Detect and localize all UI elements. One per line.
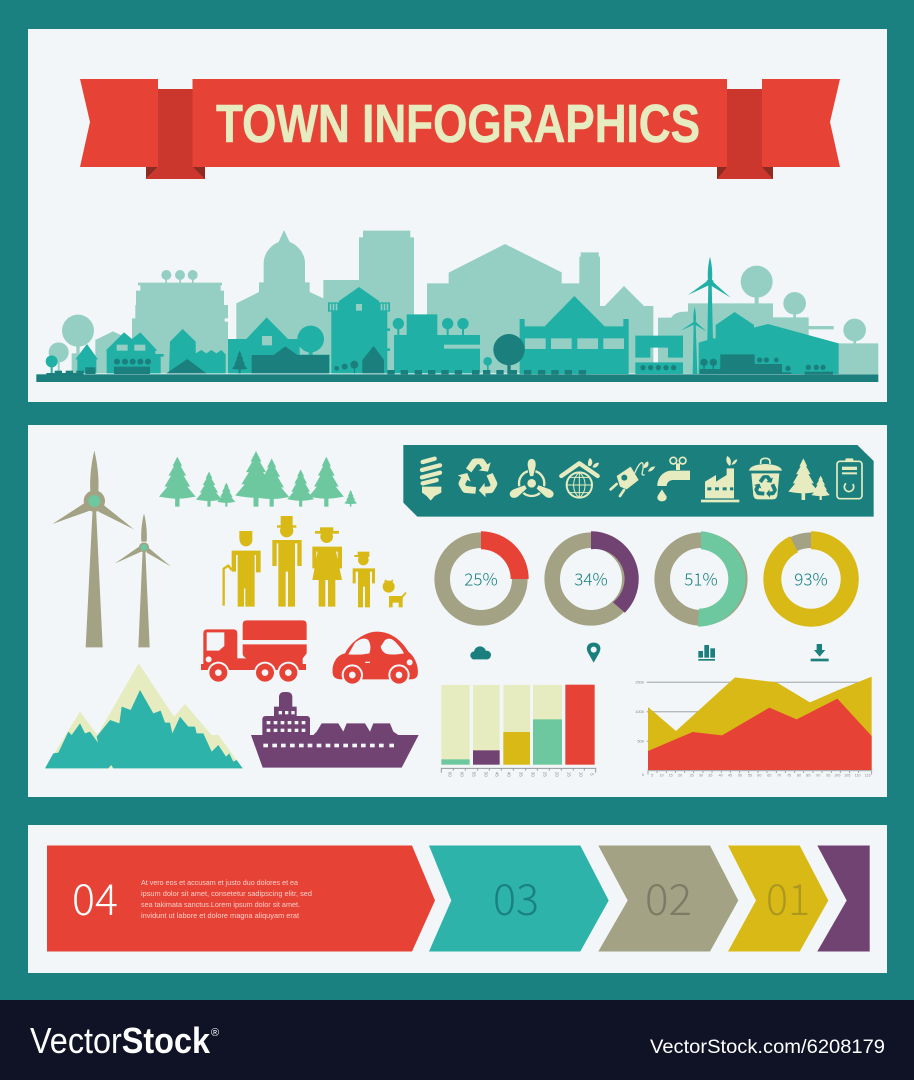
icon: pine trees <box>159 451 357 507</box>
icon: mountains <box>45 663 243 768</box>
area chart x labels: 95 <box>826 773 830 777</box>
icon: twin pines <box>788 458 830 500</box>
arrow: end block <box>817 846 870 952</box>
area chart x labels: 70 <box>777 773 781 777</box>
donut chart: 34% <box>552 531 639 618</box>
footer bar <box>0 1000 914 1080</box>
arrow 04 body text: ipsum dolor sit amet, consetetur sadipscing elitr, sed <box>141 889 312 898</box>
area chart x labels: 15 <box>669 773 673 777</box>
area chart y labels: 1500 <box>635 680 645 685</box>
panel: town elements <box>28 425 887 797</box>
arrow 04: 04 <box>72 866 118 928</box>
area chart x labels: 10 <box>660 773 664 777</box>
bar chart <box>441 685 596 777</box>
area chart x labels: 60 <box>757 773 761 777</box>
arrow 03: 03 <box>493 866 539 928</box>
bar chart axis labels: 25 <box>542 772 547 777</box>
panel: process arrows <box>28 825 887 973</box>
panel: town skyline <box>28 29 887 402</box>
arrow 04 body text <box>141 878 312 920</box>
area chart y labels <box>635 680 645 777</box>
icon: plug <box>611 461 655 496</box>
footer logo: VectorStock <box>30 1020 211 1061</box>
area chart y labels: 1000 <box>635 709 645 714</box>
area chart x labels: 35 <box>708 773 712 777</box>
bar chart axis labels: 60 <box>460 772 465 777</box>
icon: map pin <box>587 643 600 663</box>
area chart x labels: 115 <box>865 773 871 777</box>
icon: light bulb <box>422 459 441 501</box>
donut chart: 25%: 25% <box>464 566 498 590</box>
skyline: window cut-outs <box>117 304 624 351</box>
arrow 04 body text: invidunt ut labore et dolore magna aliquyam erat <box>141 911 300 920</box>
donut chart: 51%: 51% <box>684 566 718 590</box>
area chart x labels: 55 <box>748 773 752 777</box>
area chart x labels: 75 <box>787 773 791 777</box>
icon: water tap <box>657 457 690 501</box>
area chart x labels: 50 <box>738 773 742 777</box>
icon: wind turbines <box>52 451 171 647</box>
area chart x labels: 25 <box>690 773 694 777</box>
icon: family figures <box>224 516 407 607</box>
title text: TOWN INFOGRAPHICS <box>216 94 700 154</box>
icons and figures <box>45 451 419 768</box>
area chart x labels: 85 <box>806 773 810 777</box>
donut chart: 93%: 93% <box>794 566 828 590</box>
area chart <box>635 677 872 777</box>
donut chart: 25% <box>442 531 529 618</box>
donut chart: 34%: 34% <box>574 566 608 590</box>
area chart y labels: 0 <box>642 772 645 777</box>
area chart y labels: 500 <box>637 739 645 744</box>
skyline: far light buildings <box>49 230 878 374</box>
bar chart axis labels: 5 <box>590 773 595 776</box>
skyline: middle buildings <box>46 257 839 374</box>
icon: recycle <box>454 458 501 499</box>
arrow 01: 01 <box>766 866 810 928</box>
arrow 04 <box>47 846 435 952</box>
area chart x labels: 90 <box>816 773 820 777</box>
area chart x labels: 65 <box>767 773 771 777</box>
small chart icons and charts <box>441 643 872 777</box>
icon: bar chart <box>698 645 715 661</box>
bar chart axis labels: 10 <box>578 772 583 777</box>
arrow 02: 02 <box>645 866 692 928</box>
area chart x labels: 110 <box>855 773 861 777</box>
donut chart: 51% <box>662 531 746 627</box>
bar chart axis labels: 40 <box>506 772 511 777</box>
bar chart axis labels: 55 <box>472 772 477 777</box>
bar chart axis labels <box>448 772 595 777</box>
icon: car <box>333 632 418 686</box>
bar chart axis labels: 15 <box>566 772 571 777</box>
area chart x labels: 80 <box>797 773 801 777</box>
icon: recycling bin <box>749 458 782 499</box>
title banner <box>80 79 840 179</box>
arrow 03 <box>429 846 609 952</box>
donut chart: 93% <box>763 531 859 627</box>
area chart x labels: 105 <box>844 773 850 777</box>
footer registered mark: ® <box>211 1027 219 1039</box>
bar chart axis labels: 20 <box>554 772 559 777</box>
area chart x labels: 100 <box>834 773 840 777</box>
icon: fan <box>509 458 554 498</box>
skyline illustration <box>36 230 878 382</box>
area chart x labels <box>651 773 871 777</box>
area chart x labels: 40 <box>719 773 723 777</box>
icon: download <box>811 644 829 661</box>
bar chart axis labels: 35 <box>518 772 523 777</box>
area chart x labels: 45 <box>728 773 732 777</box>
arrow 02 <box>598 846 738 952</box>
bar chart axis labels: 60 <box>448 772 453 777</box>
icon: battery <box>837 458 862 499</box>
footer image id: VectorStock.com/6208179 <box>650 1037 885 1058</box>
arrow 04 body text: At vero eos et accusam et justo duo dolores et ea <box>141 878 299 887</box>
area chart x labels: 5 <box>651 773 653 777</box>
arrow 01 <box>728 846 828 952</box>
bar chart axis labels: 30 <box>530 772 535 777</box>
skyline: dark foreground <box>36 334 878 382</box>
icon: factory <box>701 456 739 502</box>
icon: ship <box>251 692 419 768</box>
icon: cloud <box>470 646 491 659</box>
area chart x labels: 20 <box>678 773 682 777</box>
area chart x labels: 30 <box>699 773 703 777</box>
bar chart axis labels: 45 <box>494 772 499 777</box>
icon strip <box>403 445 874 517</box>
icon: truck <box>201 620 307 684</box>
icon: globe house <box>561 458 599 498</box>
bar chart axis labels: 50 <box>484 772 489 777</box>
arrow 04 body text: sea takimata sanctus.Lorem ipsum dolor sit amet. <box>141 900 300 909</box>
